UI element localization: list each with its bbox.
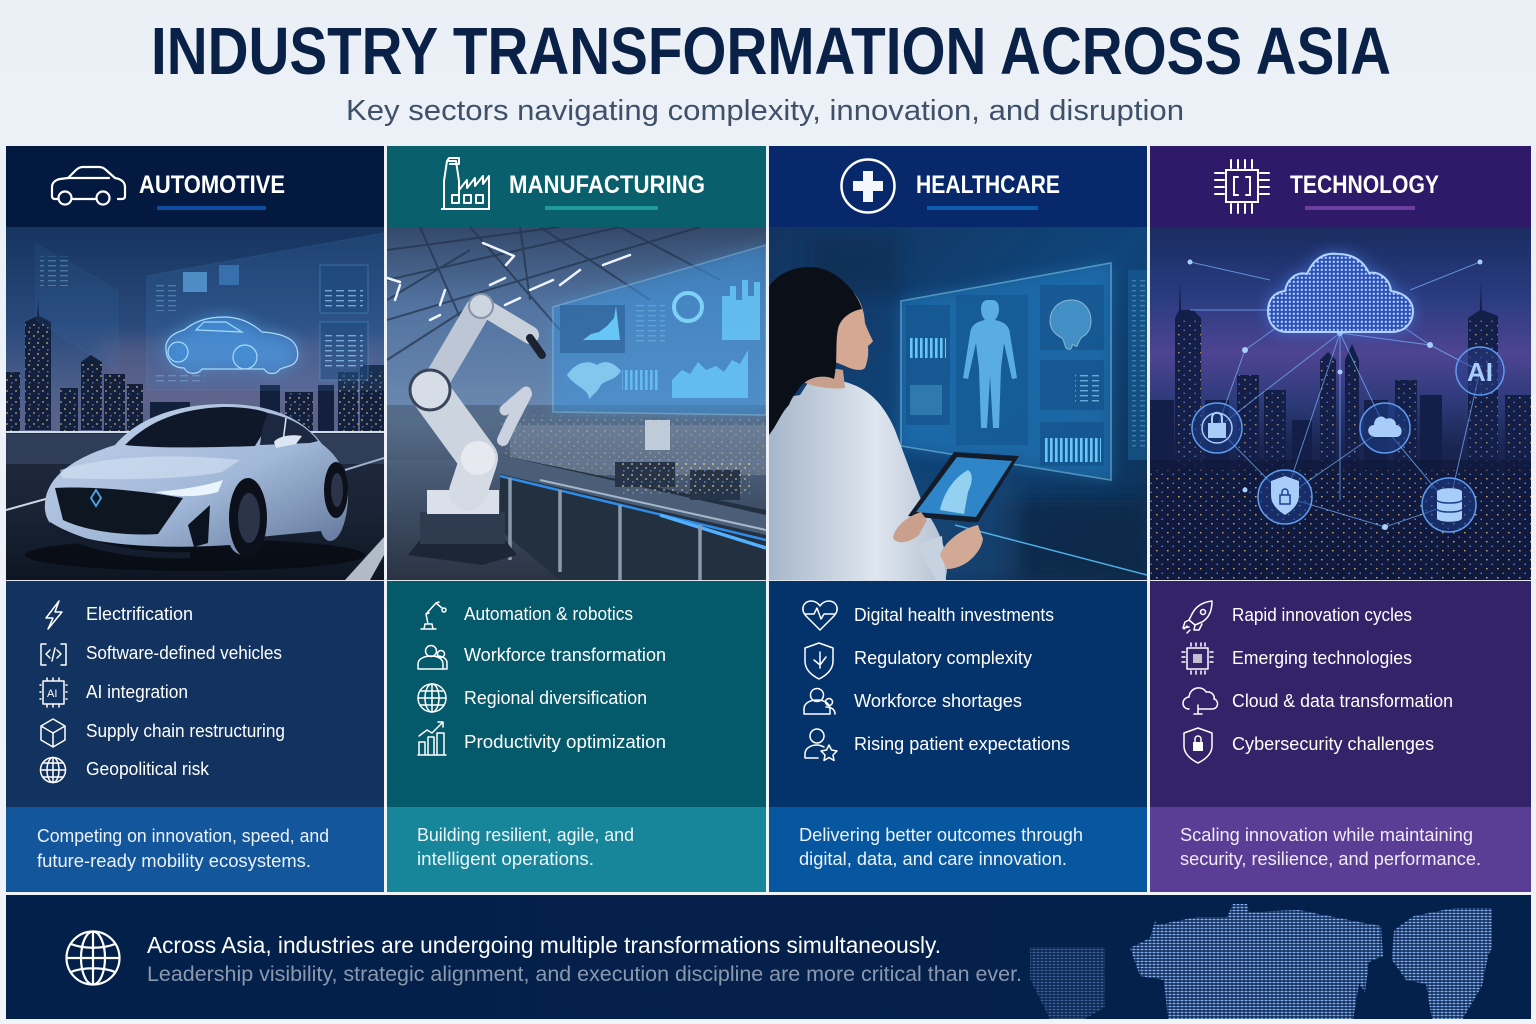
- footer: healthcare: digital, data, and care innovation.: [799, 848, 1067, 869]
- list: healthcare drivers: Workforce shortages: [854, 691, 1022, 711]
- icon: car: [52, 167, 125, 204]
- list: healthcare drivers: Rising patient expectations: [854, 734, 1070, 754]
- heading: automotive: AUTOMOTIVE: [139, 171, 285, 199]
- heading: manufacturing: MANUFACTURING: [509, 171, 705, 199]
- footer: manufacturing: Building resilient, agile, and: [417, 824, 634, 845]
- footer: technology: [1180, 824, 1481, 869]
- icon: factory: [441, 158, 490, 209]
- footer: automotive: Competing on innovation, speed, and: [37, 825, 329, 846]
- list: automotive drivers: [86, 604, 285, 779]
- footer: technology: security, resilience, and performance.: [1180, 848, 1481, 869]
- icons: healthcare drivers: [803, 601, 837, 760]
- heading: healthcare: HEALTHCARE: [916, 171, 1060, 199]
- footer: automotive: [37, 825, 329, 871]
- list: manufacturing drivers: Productivity optimization: [464, 732, 666, 752]
- footer: manufacturing: intelligent operations.: [417, 848, 594, 869]
- tablet: [893, 452, 1019, 569]
- list: healthcare drivers: [854, 605, 1070, 754]
- list: automotive drivers: Software-defined vehicles: [86, 643, 282, 663]
- list: technology drivers: Emerging technologies: [1232, 648, 1412, 668]
- text: conclusion: Across Asia, industries are undergoing multiple transformations simultaneously.: [147, 932, 941, 958]
- icons: automotive drivers: AI: [47, 688, 57, 700]
- image: doctor with holographic screen: [769, 227, 1147, 580]
- icon: medical cross: [842, 160, 894, 212]
- robot arm: [408, 294, 542, 565]
- footer: automotive: future-ready mobility ecosystems.: [37, 850, 311, 871]
- network lines: [1190, 262, 1480, 527]
- node: AI: [1456, 347, 1504, 395]
- doctor: [769, 267, 947, 580]
- list: automotive drivers: Supply chain restructuring: [86, 721, 285, 741]
- panel: automotive: [6, 146, 384, 892]
- node: AI: AI: [1467, 357, 1493, 387]
- list: technology drivers: Cloud & data transformation: [1232, 691, 1453, 711]
- conveyor line: [500, 420, 766, 580]
- footer: healthcare: Delivering better outcomes through: [799, 824, 1083, 845]
- list: technology drivers: [1232, 605, 1453, 754]
- dotted cloud: [1268, 254, 1413, 332]
- icons: manufacturing drivers: [418, 602, 447, 755]
- list: manufacturing drivers: Automation & robotics: [464, 604, 633, 624]
- footer: technology: Scaling innovation while maintaining: [1180, 824, 1473, 845]
- node: shield: [1258, 470, 1312, 524]
- list: automotive drivers: AI integration: [86, 682, 188, 702]
- heading: technology: TECHNOLOGY: [1290, 171, 1439, 199]
- text: conclusion: [147, 932, 1022, 986]
- icon: chip: [1215, 160, 1269, 213]
- footer: manufacturing: [417, 824, 634, 869]
- text: conclusion: Leadership visibility, strategic alignment, and execution discipline are more critical than ever.: [147, 962, 1022, 986]
- banner: conclusion: [6, 895, 1531, 1020]
- list: manufacturing drivers: [464, 604, 666, 752]
- list: manufacturing drivers: Regional diversification: [464, 688, 647, 708]
- icon: globe: [66, 931, 120, 985]
- panel: healthcare: [769, 146, 1147, 892]
- list: automotive drivers: Geopolitical risk: [86, 759, 210, 779]
- node: database: [1422, 478, 1476, 532]
- node: cloud: [1360, 403, 1410, 453]
- icons: technology drivers: [1182, 601, 1218, 763]
- list: automotive drivers: Electrification: [86, 604, 193, 624]
- hologram dashboard: [553, 245, 766, 415]
- image: car and city skyline with hologram: [6, 227, 384, 580]
- list: healthcare drivers: Digital health investments: [854, 605, 1054, 625]
- subtitle: Key sectors navigating complexity, innovation, and disruption: [346, 95, 1184, 127]
- image: robot factory with dashboards: [387, 227, 766, 580]
- hologram car: [166, 317, 298, 374]
- image: smart city network with cloud: [1150, 227, 1531, 580]
- panel: manufacturing: [387, 146, 766, 892]
- node: lock: [1192, 403, 1242, 453]
- hologram body scan screen: [901, 263, 1111, 480]
- list: healthcare drivers: Regulatory complexity: [854, 648, 1032, 668]
- icons: automotive drivers: [40, 601, 67, 782]
- list: technology drivers: Cybersecurity challenges: [1232, 734, 1434, 754]
- panel: technology: [1150, 146, 1531, 892]
- footer: healthcare: [799, 824, 1083, 869]
- dotted world map: [1030, 904, 1492, 1020]
- silver car: [25, 404, 365, 571]
- list: technology drivers: Rapid innovation cycles: [1232, 605, 1412, 625]
- list: manufacturing drivers: Workforce transformation: [464, 645, 666, 665]
